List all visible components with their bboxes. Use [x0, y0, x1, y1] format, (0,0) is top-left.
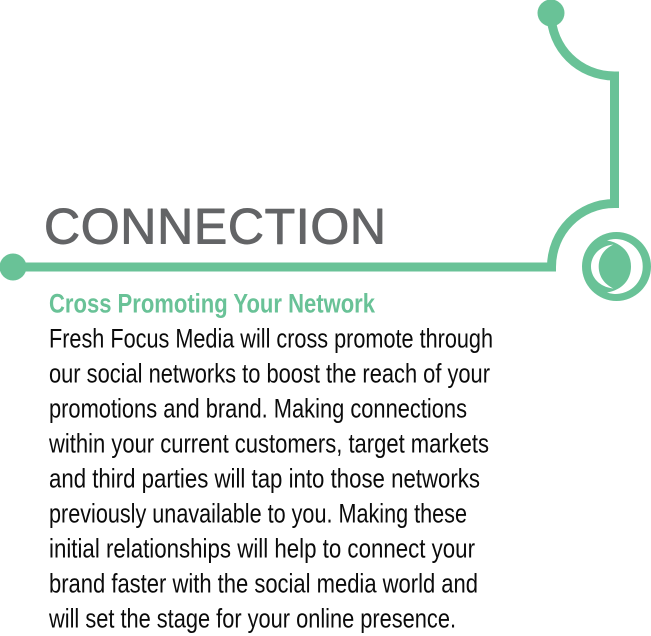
body text: Fresh Focus Media will cross promote through [49, 324, 493, 354]
body text: our social networks to boost the reach of your [49, 358, 490, 388]
section heading: Cross Promoting Your Network [49, 288, 375, 318]
body text: within your current customers, target markets [48, 428, 489, 458]
body text: will set the stage for your online presence. [48, 604, 456, 634]
body text [48, 324, 493, 634]
body text: initial relationships will help to connect your [49, 534, 475, 564]
body text: previously unavailable to you. Making these [49, 498, 467, 528]
body text: promotions and brand. Making connections [49, 394, 467, 424]
title: CONNECTION [44, 198, 386, 254]
body text: brand faster with the social media world and [49, 568, 478, 598]
icon: ring with crescent eye [582, 232, 651, 301]
body text: and third parties will tap into those networks [49, 464, 480, 494]
connector line with end dots [0, 0, 614, 280]
